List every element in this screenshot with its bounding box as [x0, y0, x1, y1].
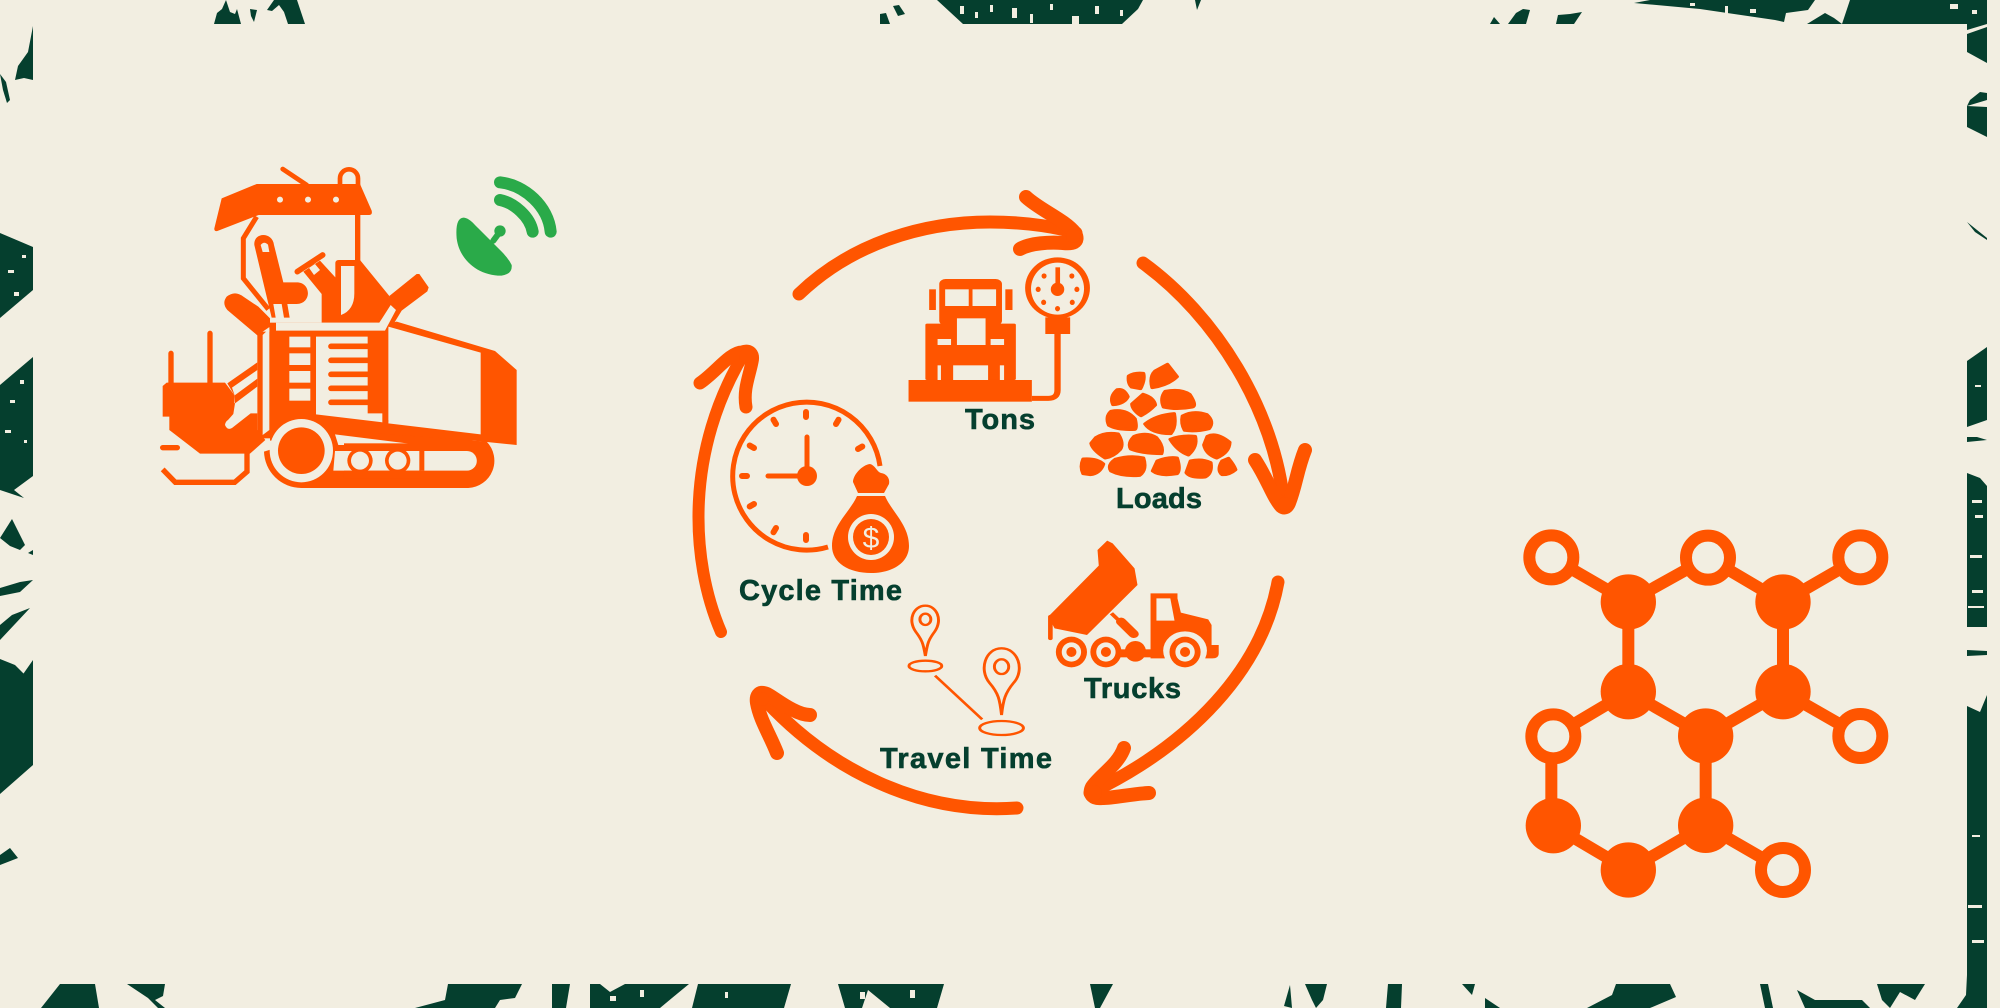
control console	[297, 255, 323, 272]
icon: molecule network	[1526, 535, 1882, 898]
icon: asphalt paver	[163, 169, 551, 488]
cycle arrow: trucks to travel time	[1086, 582, 1278, 801]
label: Cycle Time: Cycle Time	[739, 575, 902, 607]
cycle arrow: cycle time to tons	[698, 349, 753, 632]
icon: satellite dish signal	[456, 182, 551, 276]
screed unit	[171, 333, 210, 385]
icon: clock with money bag: $	[863, 522, 880, 555]
label: Tons: Tons	[965, 404, 1035, 436]
icon: truck on weigh scale	[909, 257, 1090, 402]
crawler track	[264, 419, 494, 488]
paver canopy	[214, 169, 372, 263]
icon: dump truck	[1048, 541, 1219, 670]
engine panels	[289, 337, 382, 422]
label: Trucks: Trucks	[1084, 673, 1181, 705]
cycle arrow: travel time to cycle time	[755, 692, 1017, 809]
icon: clock with money bag	[733, 402, 909, 573]
operator seat	[254, 235, 308, 318]
label: Loads: Loads	[1116, 483, 1202, 515]
icon: pile of rocks	[1082, 364, 1236, 477]
icon: travel map pins	[909, 606, 1023, 735]
hopper	[270, 322, 517, 445]
cycle arrow: loads to trucks	[1143, 263, 1305, 511]
cycle arrow: tons to loads	[799, 197, 1080, 294]
label: Travel Time: Travel Time	[880, 743, 1052, 775]
